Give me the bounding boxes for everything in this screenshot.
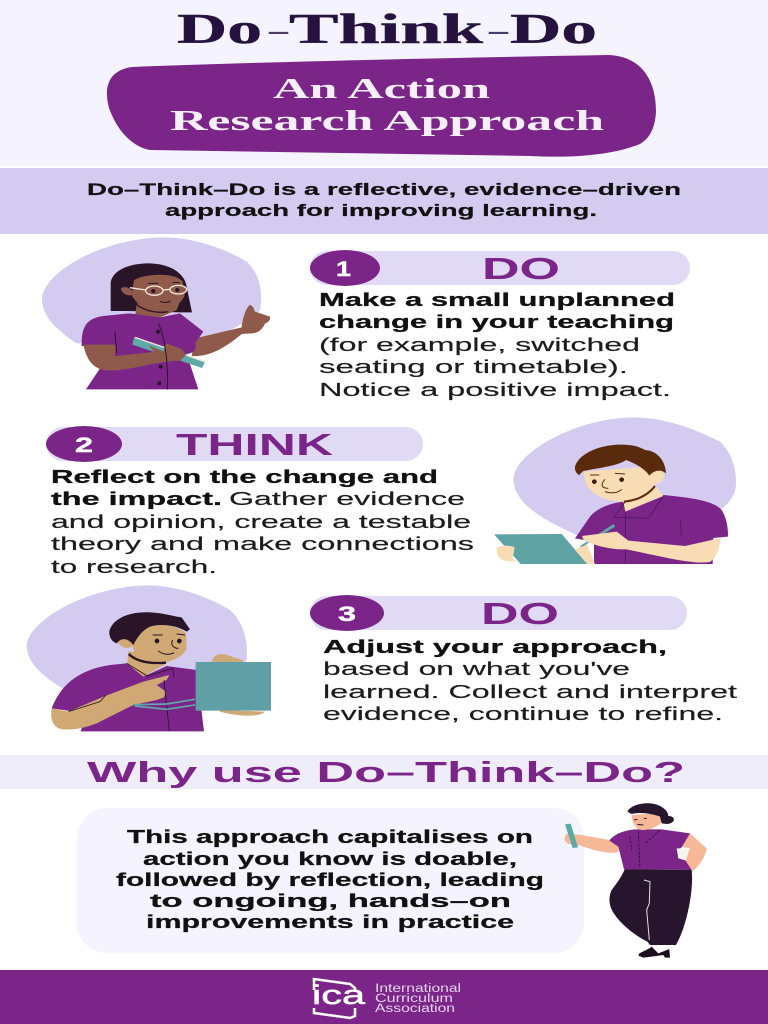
step 2 text: Gather evidence [229,489,465,509]
step 3 heading pill [310,595,687,631]
step 2 text: theory and make connections [51,534,474,554]
panel: introduction band: approach for improving learning. [165,202,597,220]
panel: why use explanation: followed by reflection, leading [116,870,544,890]
subtitle: An Action [273,74,491,105]
title: Think [289,7,484,53]
panel: introduction band [0,168,768,234]
step 2 heading pill: 2 [75,434,93,457]
illustration: man pointing at a card [27,585,271,731]
step 1 text: Make a small unplanned [319,290,675,310]
step 3 text: Adjust your approach, [323,637,667,657]
step 3 text: evidence, continue to refine. [323,704,723,724]
panel: header [0,0,768,166]
step 2 text: Reflect on the change and [51,467,438,487]
logo: International Curriculum Association: Curriculum [375,993,453,1005]
step 2 text: the impact. [51,489,222,509]
illustration: teacher with glasses holding a book [42,237,270,389]
step 2 text [51,467,474,577]
section heading: why use [0,755,768,789]
illustration: standing woman holding a tablet [565,803,707,958]
title [177,7,597,53]
panel: why use explanation [77,808,584,953]
subtitle [170,74,605,137]
logo: International Curriculum Association: International [375,983,461,995]
panel: why use explanation: improvements in practice [146,912,514,932]
step 1 heading pill: 1 [336,258,351,281]
logo: International Curriculum Association: Association [375,1003,455,1015]
step 1 heading pill: DO [482,251,560,286]
logo: International Curriculum Association [312,979,461,1018]
step 3 heading pill: DO [481,596,559,631]
step 1 text [319,290,675,400]
footer band [0,970,768,1024]
title: Do [177,7,262,53]
title: – [268,7,289,53]
step 2 text: and opinion, create a testable [51,512,471,532]
subtitle: Research Approach [170,106,605,137]
step 2 text: to research. [51,557,217,577]
panel: why use explanation: to ongoing, hands–on [150,891,511,911]
section heading: why use: Why use Do–Think–Do? [87,757,685,789]
subtitle blob [107,55,656,157]
step 1 heading pill [310,250,690,286]
step 2 heading pill: THINK [176,427,334,462]
step 1 text: seating or timetable). [319,357,628,377]
title: – [488,7,509,53]
illustration: man writing on a tablet [494,417,736,564]
step 1 text: (for example, switched [319,335,640,355]
step 1 text: change in your teaching [319,312,674,332]
step 3 heading pill: 3 [338,603,356,626]
panel: why use explanation: action you know is doable, [143,849,517,869]
step 3 text: learned. Collect and interpret [323,682,737,702]
step 2 heading pill [46,426,423,462]
title: Do [510,7,597,53]
logo: International Curriculum Association: ica [312,980,367,1010]
step 1 text: Notice a positive impact. [319,380,671,400]
step 3 text [323,637,737,724]
step 3 text: based on what you've [323,659,630,679]
panel: introduction band: Do–Think–Do is a reflective, evidence–driven [87,181,681,199]
panel: why use explanation: This approach capitalises on [127,827,533,847]
